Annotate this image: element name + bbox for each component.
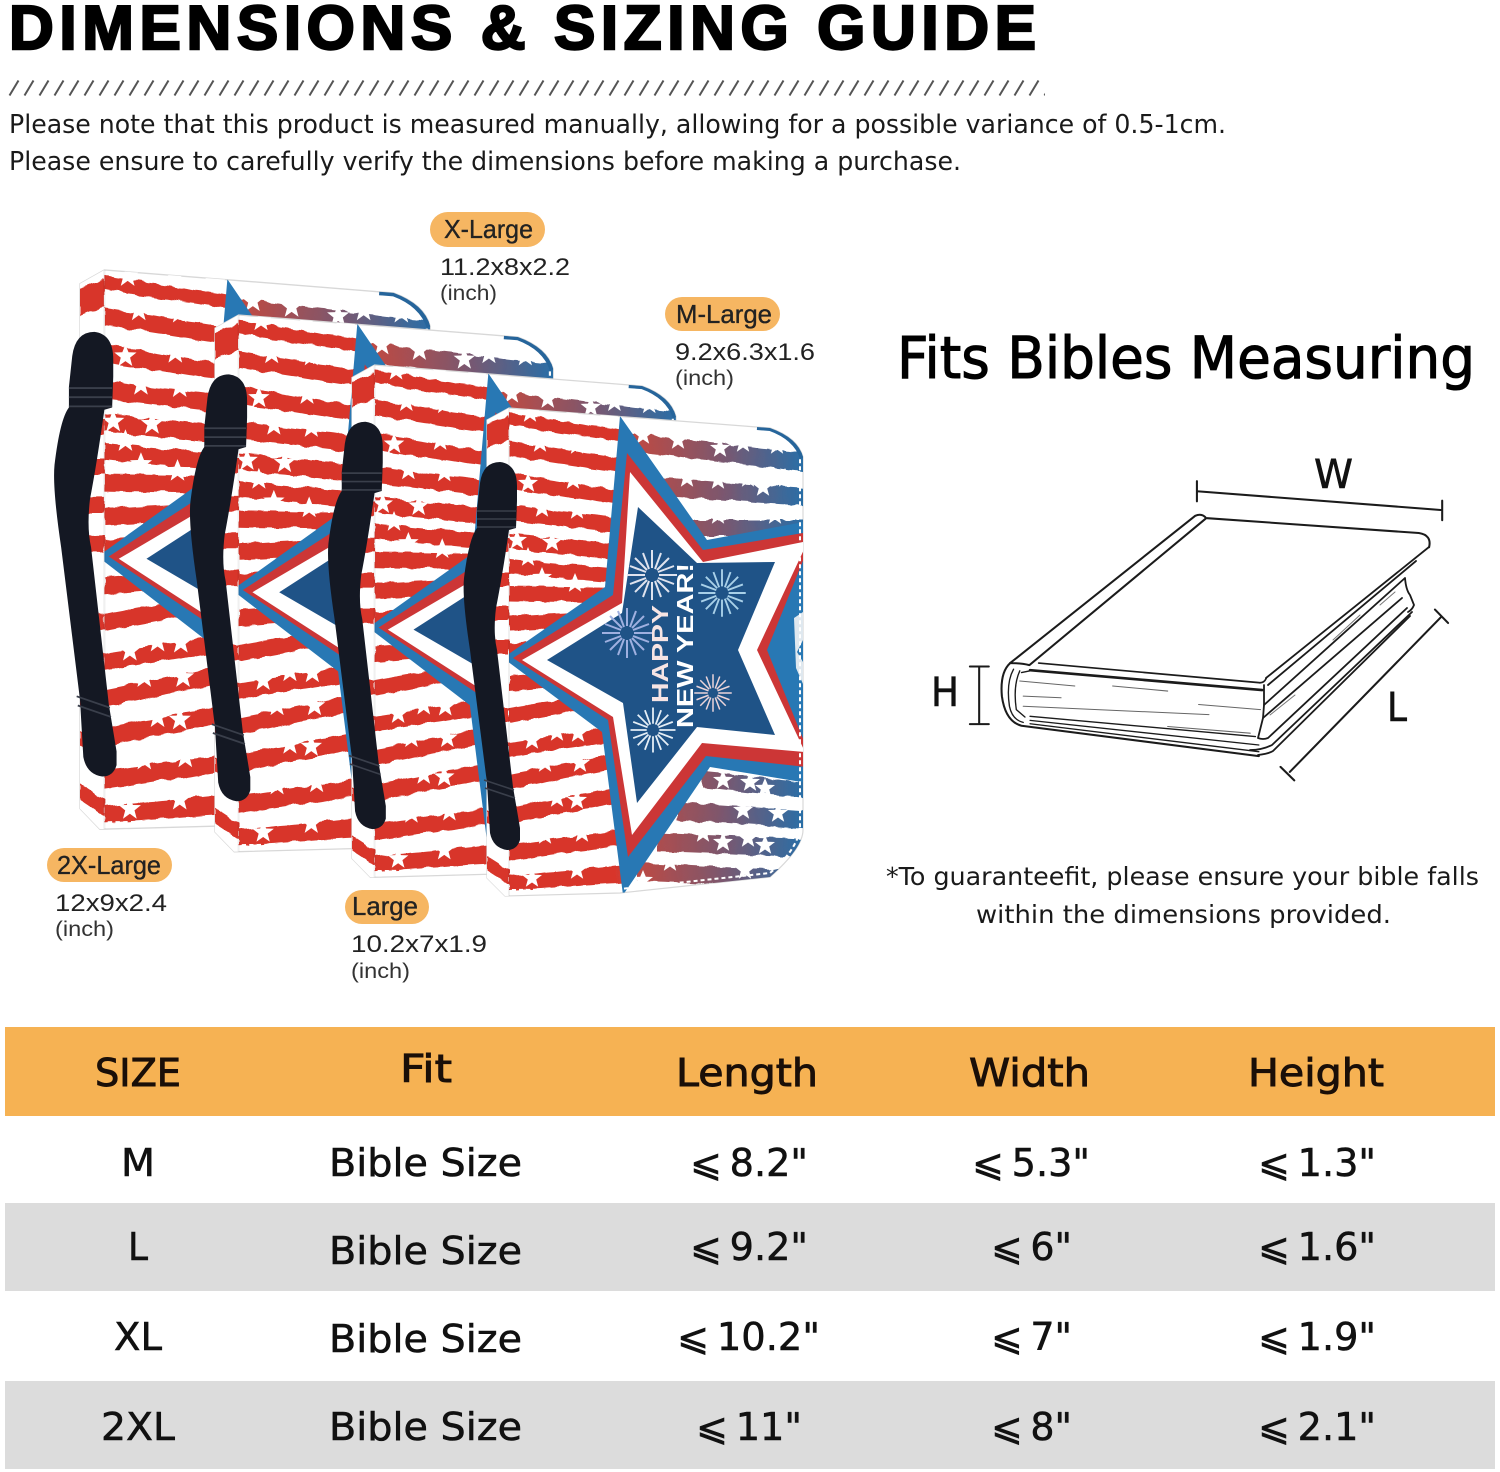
greeting text: HAPPY (647, 605, 673, 703)
size label: M-Large: M-Large (676, 299, 772, 329)
size label: X-Large (430, 212, 570, 305)
table header: Length (676, 1051, 818, 1095)
size table (5, 1027, 1495, 1469)
row M: ⩽ 5.3" (972, 1141, 1090, 1185)
size label: 2X-Large: 2X-Large (57, 850, 161, 880)
letter W: W (1314, 452, 1353, 498)
row 2XL: ⩽ 8" (991, 1405, 1072, 1449)
size label: 2X-Large: 12x9x2.4 (55, 890, 167, 917)
greeting text: NEW YEAR! (672, 563, 698, 728)
row L: Bible Size (329, 1229, 522, 1273)
table header: Width (969, 1051, 1090, 1095)
row L: ⩽ 6" (991, 1225, 1072, 1269)
size label: M-Large (665, 297, 815, 390)
size label: X-Large: 11.2x8x2.2 (440, 254, 570, 281)
measurement note: Please ensure to carefully verify the dimensions before making a purchase. (9, 147, 961, 177)
row 2XL (5, 1381, 1495, 1469)
size label: Large: Large (352, 891, 418, 921)
product photo: four bible covers (54, 264, 820, 898)
table header: SIZE (95, 1051, 181, 1095)
fit note (886, 862, 1479, 929)
heading: fits bibles measuring: Fits Bibles Measuring (897, 324, 1475, 392)
row XL: ⩽ 7" (991, 1315, 1072, 1359)
size label: M-Large: 9.2x6.3x1.6 (675, 339, 815, 366)
row XL: ⩽ 10.2" (677, 1315, 820, 1359)
length dimension bar (1281, 610, 1448, 780)
row XL: ⩽ 1.9" (1258, 1315, 1376, 1359)
size label: M-Large: (inch) (675, 367, 734, 390)
book line drawing (970, 481, 1448, 780)
row 2XL: ⩽ 11" (696, 1405, 802, 1449)
book measuring diagram (931, 452, 1448, 780)
row M: Bible Size (329, 1141, 522, 1185)
row L: L (128, 1225, 148, 1269)
book long side ridges (1250, 547, 1429, 755)
fireworks on the star (602, 550, 746, 752)
size label: 2X-Large (47, 848, 172, 941)
measurement note: Please note that this product is measured manually, allowing for a possible variance of 0.5-1cm. (9, 110, 1226, 140)
row 2XL: 2XL (101, 1405, 175, 1449)
row 2XL: ⩽ 2.1" (1258, 1405, 1376, 1449)
row L (5, 1203, 1495, 1291)
row M: ⩽ 8.2" (690, 1141, 808, 1185)
letter H: H (931, 670, 959, 716)
size label: Large: (inch) (351, 960, 410, 983)
row M: M (121, 1141, 155, 1185)
width dimension bar (1197, 481, 1442, 520)
fit note: *To guaranteefit, please ensure your bible falls (886, 862, 1479, 891)
size label: Large (345, 890, 487, 983)
size label: X-Large: X-Large (444, 214, 533, 244)
greeting text (647, 563, 698, 728)
height dimension bar (970, 666, 989, 724)
letter L: L (1387, 685, 1408, 731)
hatched rule (8, 80, 1045, 96)
fit note: within the dimensions provided. (976, 900, 1391, 929)
size label: 2X-Large: (inch) (55, 918, 114, 941)
measurement note (9, 110, 1226, 177)
table header (5, 1027, 1495, 1116)
table header: Fit (400, 1047, 452, 1091)
size label: Large: 10.2x7x1.9 (351, 931, 487, 958)
table header: Height (1248, 1051, 1384, 1095)
row 2XL: Bible Size (329, 1405, 522, 1449)
row M: ⩽ 1.3" (1258, 1141, 1376, 1185)
size label: X-Large: (inch) (440, 282, 497, 305)
row XL: Bible Size (329, 1317, 522, 1361)
row XL: XL (114, 1315, 162, 1359)
row L: ⩽ 1.6" (1258, 1225, 1376, 1269)
row XL (114, 1315, 1376, 1361)
row L: ⩽ 9.2" (690, 1225, 808, 1269)
row M (121, 1141, 1376, 1185)
